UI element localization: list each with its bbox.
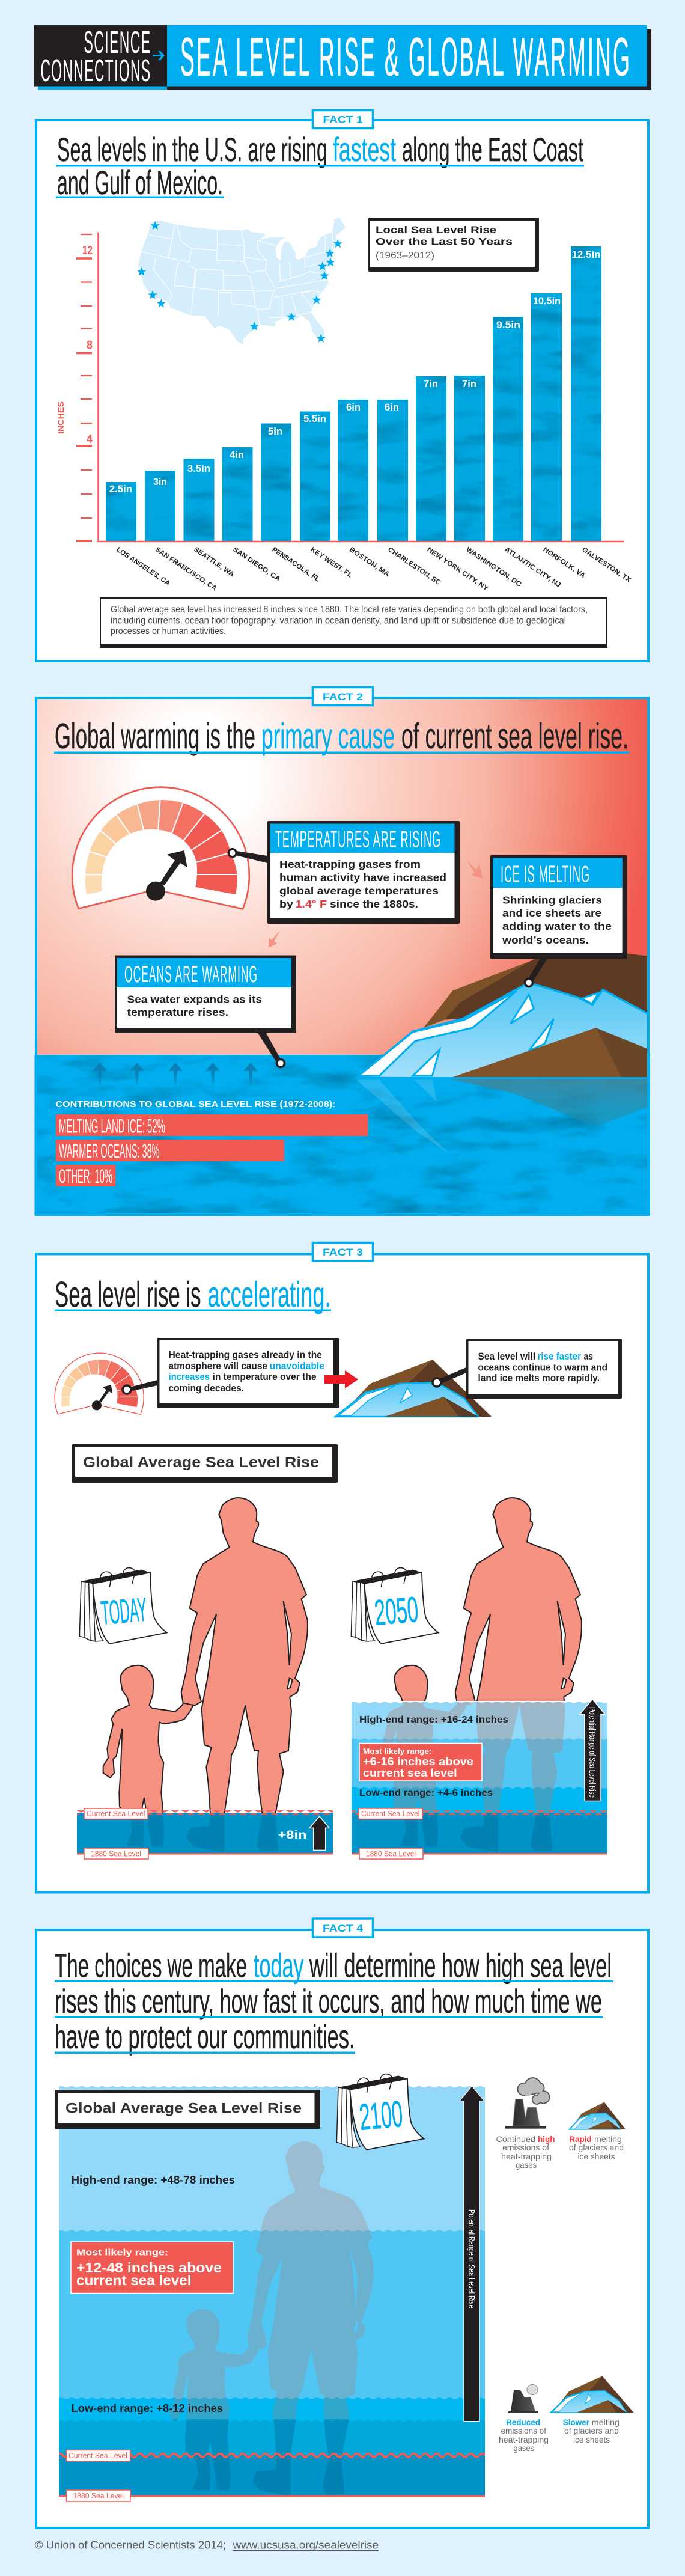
label: 1880 sea level 2100: 1880 Sea Level (73, 2491, 124, 2500)
panel: fact 3 (36, 1243, 648, 1892)
silhouette: parent and child today (103, 1498, 308, 1852)
bar value labels: 12.5in (572, 249, 601, 260)
line: 1880 sea level 2050 (352, 1853, 607, 1855)
caption: reduced emissions: Reduced (506, 2417, 540, 2427)
label: 1880 sea level today: 1880 Sea Level (91, 1849, 141, 1858)
callout: unavoidable increases: atmosphere will cause (168, 1361, 267, 1372)
heading: fact 3: accelerating. (208, 1275, 330, 1314)
heading: fact 2 (54, 716, 629, 756)
callout: unavoidable increases: unavoidable (270, 1361, 324, 1372)
footer: credit and link: © Union of Concerned Scientists 2014; (35, 2539, 226, 2551)
label: 1880 sea level 2100 (66, 2490, 130, 2501)
caption: rapid melting: melting (594, 2134, 622, 2144)
heading: fact 4: The choices we make (55, 1947, 247, 1985)
bar value labels: 3.5in (187, 463, 210, 474)
scene: today (77, 1498, 333, 1859)
city labels: GALVESTON, TX (580, 546, 632, 584)
wavy line: current sea level 2100 (59, 2453, 485, 2459)
icon: calendar 2100 (336, 2074, 424, 2150)
arrow: potential range 2050: Potential Range of Sea Level Rise (587, 1707, 597, 1798)
caption: continued high emissions: heat-trapping (501, 2152, 552, 2161)
note box: global average: Global average sea level has increased 8 inches since 1880. The local rate varies depending on both global and local factors, (111, 605, 588, 615)
chart title: global average 2100 (55, 2090, 320, 2129)
city labels (115, 546, 632, 593)
icon: calendar 2050: 2050 (373, 1589, 420, 1633)
value: plus 8 inches: +8in (278, 1829, 306, 1842)
arrow: temperatures to oceans (269, 930, 280, 948)
badge: fact 4 (312, 1918, 373, 1937)
icon: rapid melting mountain (569, 2102, 626, 2129)
caption: continued high emissions: high (538, 2134, 555, 2144)
bar chart: local sea level rise by city (56, 232, 632, 593)
city labels: SEATTLE, WA (192, 546, 236, 578)
caption: rapid melting: Rapid (570, 2134, 591, 2144)
badge: fact 3 (312, 1243, 373, 1261)
label: current sea level 2050: Current Sea Level (361, 1809, 420, 1818)
callout: rise faster: rise faster (537, 1351, 582, 1362)
callout: most likely range 2050 (359, 1743, 482, 1781)
callout: ice is melting: world’s oceans. (502, 934, 589, 946)
caption: slower melting: of glaciers and (564, 2426, 619, 2435)
caption: slower melting: Slower (563, 2417, 590, 2427)
bars with water texture (102, 243, 607, 542)
caption: slower melting: ice sheets (573, 2435, 610, 2444)
chart title: global average sea level rise (72, 1444, 338, 1483)
chart: contributions to sea level rise: CONTRIBUTIONS TO GLOBAL SEA LEVEL RISE (1972-2008): (55, 1099, 335, 1109)
line: 1880 sea level 2100 (59, 2495, 485, 2497)
city labels: SAN FRANCISCO, CA (154, 546, 218, 593)
submerged silhouette: 2100 (169, 2141, 374, 2496)
caption: reduced emissions: gases (513, 2443, 534, 2453)
callout: oceans are warming: temperature rises. (127, 1006, 228, 1018)
note box: global average: processes or human activities. (111, 626, 226, 636)
city labels: CHARLESTON, SC (386, 546, 442, 587)
header banner: SCIENCE (84, 25, 151, 60)
chart axis with ticks (56, 232, 624, 542)
callout: unavoidable increases: Heat-trapping gases already in the (168, 1350, 322, 1361)
callout: unavoidable increases: increases (168, 1372, 210, 1382)
header banner (34, 25, 651, 90)
label: current sea level today: Current Sea Level (87, 1809, 145, 1818)
sky gradient background (35, 697, 648, 1055)
callout: local sea level rise (368, 218, 539, 272)
heading: fact 3: Sea level rise is (55, 1275, 201, 1314)
footer: credit and link (35, 2539, 379, 2551)
callout: local sea level rise: Local Sea Level Rise (376, 224, 496, 236)
badge: fact 1 (312, 111, 373, 129)
heading: fact 2: Global warming is the (55, 716, 255, 756)
badge: fact 4: FACT 4 (323, 1923, 364, 1934)
caption: continued high emissions: gases (516, 2160, 537, 2170)
bar value labels: 5in (268, 426, 282, 437)
label: low-end range 2050: Low-end range: +4-6 inches (359, 1788, 493, 1798)
callout: temperatures are rising: human activity have increased (279, 871, 446, 884)
badge: fact 2 (312, 688, 373, 706)
callout: most likely range 2050: Most likely range: (363, 1747, 431, 1756)
chart: contributions to sea level rise (55, 1099, 368, 1187)
bar value labels: 10.5in (533, 295, 561, 307)
callout: ice is melting: Shrinking glaciers (502, 894, 602, 906)
city labels: ATLANTIC CITY, NJ (503, 546, 562, 589)
panel: fact 4 (36, 1918, 648, 2528)
heading: fact 1: and Gulf of Mexico. (57, 163, 223, 201)
label: high-end range 2100: High-end range: +48-78 inches (71, 2174, 235, 2186)
silhouette: parent and child 2050 (377, 1498, 582, 1852)
chart title: global average sea level rise: Global Average Sea Level Rise (83, 1454, 319, 1471)
callout: local sea level rise: Over the Last 50 Years (376, 236, 513, 248)
connector: small gauge (123, 1380, 157, 1394)
water bands: 2100 (59, 2086, 485, 2497)
callout: ice is melting: adding water to the (502, 920, 612, 932)
city labels: LOS ANGELES, CA (115, 546, 171, 587)
header banner: CONNECTIONS (41, 53, 151, 88)
label: high-end range 2050: High-end range: +16-24 inches (359, 1715, 508, 1725)
icon: calendar today (79, 1568, 167, 1644)
callout: rise faster: as (584, 1351, 593, 1362)
label: low-end range 2100: Low-end range: +8-12 inches (71, 2402, 223, 2414)
chart axis with ticks: INCHES (56, 401, 65, 434)
panel: fact 1 (36, 111, 648, 661)
callout: most likely range 2100: Most likely range: (76, 2248, 168, 2258)
arrow: potential range 2100: Potential Range of Sea Level Rise (466, 2209, 476, 2309)
sea (35, 1055, 650, 1215)
callout: oceans are warming: OCEANS ARE WARMING (124, 962, 258, 987)
submerged silhouette: 2050 (382, 1702, 565, 1852)
icon: reduced emissions factory (508, 2385, 538, 2413)
bar value labels: 9.5in (496, 319, 520, 331)
bar value labels: 7in (424, 378, 438, 389)
city labels: NORFOLK, VA (541, 546, 586, 579)
callout: most likely range 2100: +12-48 inches above (76, 2260, 222, 2275)
chart: contributions to sea level rise: WARMER OCEANS: 38% (59, 1140, 160, 1162)
scene: 2100 (55, 2074, 485, 2501)
callout: temperatures are rising: global average temperatures (279, 885, 439, 897)
bar value labels: 5.5in (303, 413, 326, 424)
callout: temperatures are rising: Heat-trapping gases from (279, 858, 421, 870)
caption: continued high emissions (496, 2134, 555, 2170)
water: today (77, 1813, 333, 1854)
illustration: glacier and mountain (356, 954, 650, 1154)
caption: slower melting (563, 2417, 620, 2444)
callout: unavoidable increases: in temperature over the (213, 1372, 316, 1382)
connector: small glacier (433, 1367, 466, 1387)
callout: local sea level rise: (1963–2012) (376, 251, 434, 261)
chart: contributions to sea level rise: OTHER: 10% (59, 1165, 112, 1187)
callout: most likely range 2100: current sea level (76, 2272, 191, 2288)
line: 1880 sea level today (77, 1853, 333, 1855)
callout: temperatures are rising: 1.4° F (296, 898, 327, 910)
icon: calendar 2050 (351, 1568, 439, 1644)
heading: fact 2: primary cause (261, 716, 395, 756)
bar value labels: 7in (462, 378, 476, 389)
label: 1880 sea level 2050: 1880 Sea Level (366, 1849, 416, 1858)
bar value labels: 6in (385, 401, 399, 413)
caption: reduced emissions (499, 2417, 549, 2453)
bar value labels: 4in (230, 449, 244, 460)
icon: small glacier and mountain (335, 1360, 492, 1417)
header label (41, 25, 151, 88)
submerged feet: today (126, 1813, 279, 1852)
chart axis with ticks: 12 (82, 244, 93, 257)
heading: fact 4 (55, 1947, 613, 2056)
scene: 2050 (351, 1498, 607, 1859)
badge: fact 3: FACT 3 (323, 1247, 363, 1258)
wavy line: current sea level today (77, 1810, 333, 1815)
callout: most likely range 2100 (71, 2242, 233, 2294)
icon: slower melting mountain (550, 2376, 634, 2413)
chart title: global average 2100: Global Average Sea Level Rise (65, 2100, 302, 2117)
heading: fact 4: today (254, 1947, 304, 1985)
caption: rapid melting (569, 2134, 624, 2161)
caption: continued high emissions: Continued (496, 2134, 535, 2144)
callout: unavoidable increases (157, 1338, 339, 1408)
note box: global average (100, 597, 607, 648)
callout: unavoidable increases: coming decades. (168, 1383, 244, 1394)
callout: oceans are warming: Sea water expands as its (127, 993, 262, 1005)
heading: fact 4: have to protect our communities. (55, 2018, 355, 2056)
water bands: 2050 (352, 1701, 607, 1854)
arrow: temperatures to ice (466, 859, 483, 879)
callout: rise faster: Sea level will (478, 1351, 535, 1362)
icon: header arrow (153, 51, 165, 60)
callout: rise faster: land ice melts more rapidly. (478, 1373, 600, 1384)
callout: temperatures are rising: by (279, 898, 293, 910)
icon: temperature gauge (72, 787, 249, 909)
connector: gauge to temperature box (228, 849, 267, 863)
city labels: SAN DIEGO, CA (231, 546, 281, 583)
callout: temperatures are rising (267, 821, 460, 924)
callout: most likely range 2050: current sea level (363, 1767, 457, 1779)
heading: fact 1 (56, 130, 584, 201)
map: United States with tide gauge stars (137, 218, 346, 344)
arrows: rising sea (93, 1063, 258, 1085)
callout: temperatures are rising: TEMPERATURES ARE RISING (275, 827, 441, 852)
callout: ice is melting: and ice sheets are (502, 907, 601, 919)
caption: slower melting: melting (592, 2417, 620, 2427)
bar value labels: 2.5in (109, 483, 132, 495)
arrow: potential range 2050 (580, 1699, 605, 1801)
icon: calendar 2100: 2100 (358, 2093, 404, 2138)
heading: fact 1: fastest (333, 130, 396, 168)
note box: global average: including currents, ocean floor topography, variation in ocean density, and land uplift or subsidence due to geological (111, 615, 566, 626)
caption: rapid melting: ice sheets (578, 2152, 615, 2161)
icon: calendar today: TODAY (100, 1590, 148, 1632)
footer: credit and link: www.ucsusa.org/sealevelrise (232, 2539, 379, 2551)
callout: temperatures are rising: since the 1880s. (330, 898, 418, 910)
callout: rise faster: oceans continue to warm and (478, 1362, 607, 1373)
city labels: NEW YORK CITY, NY (425, 546, 490, 593)
caption: rapid melting: of glaciers and (569, 2143, 624, 2152)
label: current sea level 2100: Current Sea Level (68, 2451, 127, 2460)
arrow: red causal arrow (324, 1370, 358, 1388)
city labels: KEY WEST, FL (309, 546, 353, 579)
callout: most likely range 2050: +6-16 inches above (363, 1756, 473, 1768)
bar value labels: 6in (346, 401, 361, 413)
chart axis with ticks: 8 (87, 339, 93, 352)
city labels: PENSACOLA, FL (270, 546, 321, 583)
chart axis with ticks: 4 (87, 433, 93, 446)
icon: small temperature gauge (55, 1353, 144, 1414)
bar value labels: 3in (153, 476, 167, 487)
bar value labels (109, 249, 601, 495)
caption: continued high emissions: emissions of (502, 2143, 549, 2152)
badge: fact 2: FACT 2 (323, 691, 363, 703)
badge: fact 1: FACT 1 (323, 114, 363, 126)
arrow: plus 8 inches (309, 1816, 329, 1850)
caption: reduced emissions: heat-trapping (499, 2435, 549, 2444)
city labels: WASHINGTON, DC (464, 546, 523, 588)
icon: high emissions factory (505, 2078, 549, 2129)
callout: ice is melting (490, 855, 627, 987)
caption: reduced emissions: emissions of (501, 2426, 546, 2435)
chart: contributions to sea level rise: MELTING LAND ICE: 52% (59, 1116, 165, 1137)
panel: fact 2 (35, 688, 650, 1215)
wavy line: current sea level 2050 (352, 1810, 607, 1815)
city labels: BOSTON, MA (348, 546, 391, 578)
heading: fact 1: Sea levels in the U.S. are rising (57, 130, 327, 168)
callout: rise faster (466, 1339, 622, 1399)
callout: oceans are warming (115, 956, 296, 1067)
arrow: potential range 2100 (460, 2086, 484, 2422)
